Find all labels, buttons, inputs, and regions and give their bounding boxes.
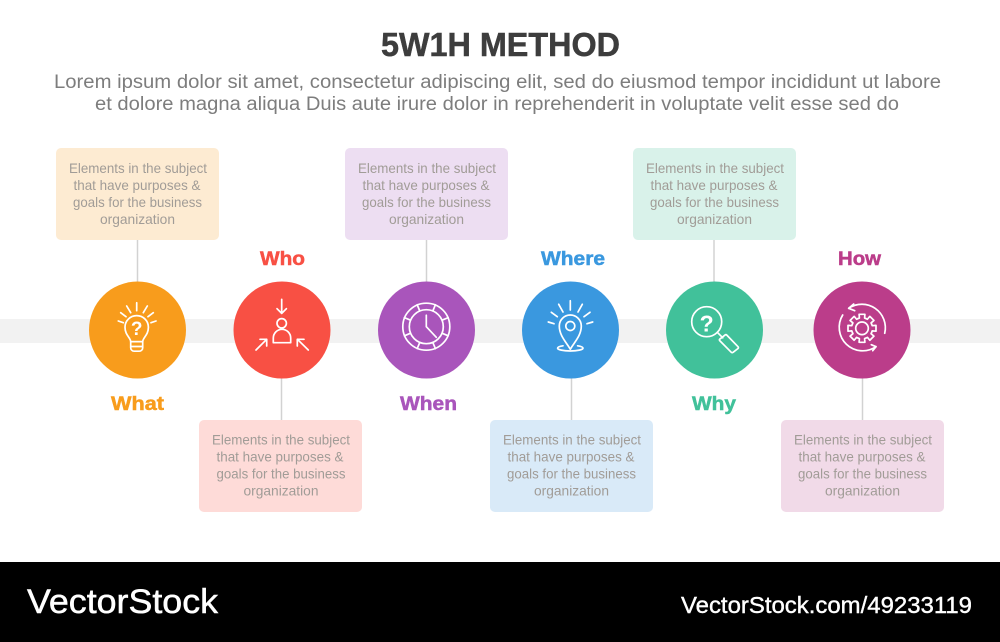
- what circle: [89, 282, 186, 378]
- where description box: [490, 420, 653, 512]
- how description box: [781, 420, 944, 512]
- why description box: [633, 148, 796, 240]
- where circle: [522, 282, 619, 378]
- what description box: organization: [100, 211, 175, 227]
- when description box: goals for the business: [362, 194, 491, 210]
- icon: magnifier with question mark: ?: [700, 310, 714, 336]
- who description box: organization: [244, 482, 318, 498]
- when description box: organization: [389, 211, 464, 227]
- how description box: Elements in the subject: [794, 432, 932, 448]
- icon: location pin: [548, 301, 593, 351]
- why description box: Elements in the subject: [646, 160, 784, 176]
- who label: Who: [260, 249, 305, 270]
- panel: who: [199, 249, 362, 512]
- what label: What: [111, 394, 165, 415]
- subtitle text: et dolore magna aliqua Duis aute irure dolor in reprehenderit in voluptate velit esse sed do: [95, 94, 899, 115]
- subtitle text: Lorem ipsum dolor sit amet, consectetur adipiscing elit, sed do eiusmod tempor incididunt ut labore: [54, 72, 941, 93]
- where description box: organization: [534, 482, 609, 498]
- what description box: [56, 148, 219, 240]
- why label: Why: [692, 394, 736, 415]
- why description box: organization: [677, 211, 752, 227]
- when label: When: [400, 394, 457, 415]
- when description box: that have purposes &: [362, 177, 490, 193]
- where description box: Elements in the subject: [503, 432, 641, 448]
- what description box: that have purposes &: [74, 177, 201, 193]
- why description box: that have purposes &: [650, 177, 778, 193]
- footer bar: [0, 562, 1000, 642]
- who description box: that have purposes &: [216, 448, 344, 464]
- panel: when: [345, 148, 508, 415]
- what description box: Elements in the subject: [69, 160, 207, 176]
- icon: gear with cycle arrows: [839, 304, 885, 351]
- why circle: [666, 282, 763, 378]
- when description box: [345, 148, 508, 240]
- icon: person with converging arrows: [256, 299, 308, 350]
- icon: magnifier with question mark: [692, 307, 738, 353]
- panel: why: [633, 148, 796, 415]
- subtitle text: [54, 72, 941, 115]
- when circle: [378, 282, 475, 378]
- where description box: that have purposes &: [508, 448, 635, 464]
- how circle: [814, 282, 910, 378]
- when description box: Elements in the subject: [358, 160, 496, 176]
- title: 5W1H METHOD: [381, 26, 620, 63]
- icon: light bulb with question mark: [118, 303, 156, 351]
- who description box: goals for the business: [216, 466, 346, 482]
- panel: how: [781, 249, 944, 512]
- who description box: Elements in the subject: [212, 432, 350, 448]
- timeline band: [0, 319, 1000, 343]
- how description box: that have purposes &: [798, 448, 926, 464]
- icon: light bulb with question mark: ?: [131, 319, 143, 340]
- how label: How: [838, 249, 881, 270]
- how description box: organization: [825, 482, 900, 498]
- who circle: [234, 282, 330, 378]
- what description box: goals for the business: [73, 194, 202, 210]
- who description box: [199, 420, 362, 512]
- how description box: goals for the business: [798, 466, 927, 482]
- panel: what: [56, 148, 219, 415]
- panel: where: [490, 249, 653, 512]
- footer image id: VectorStock.com/49233119: [681, 592, 972, 618]
- icon: clock: [403, 303, 450, 350]
- footer brand: VectorStock: [27, 583, 219, 621]
- where label: Where: [541, 249, 605, 270]
- why description box: goals for the business: [650, 194, 779, 210]
- where description box: goals for the business: [507, 466, 636, 482]
